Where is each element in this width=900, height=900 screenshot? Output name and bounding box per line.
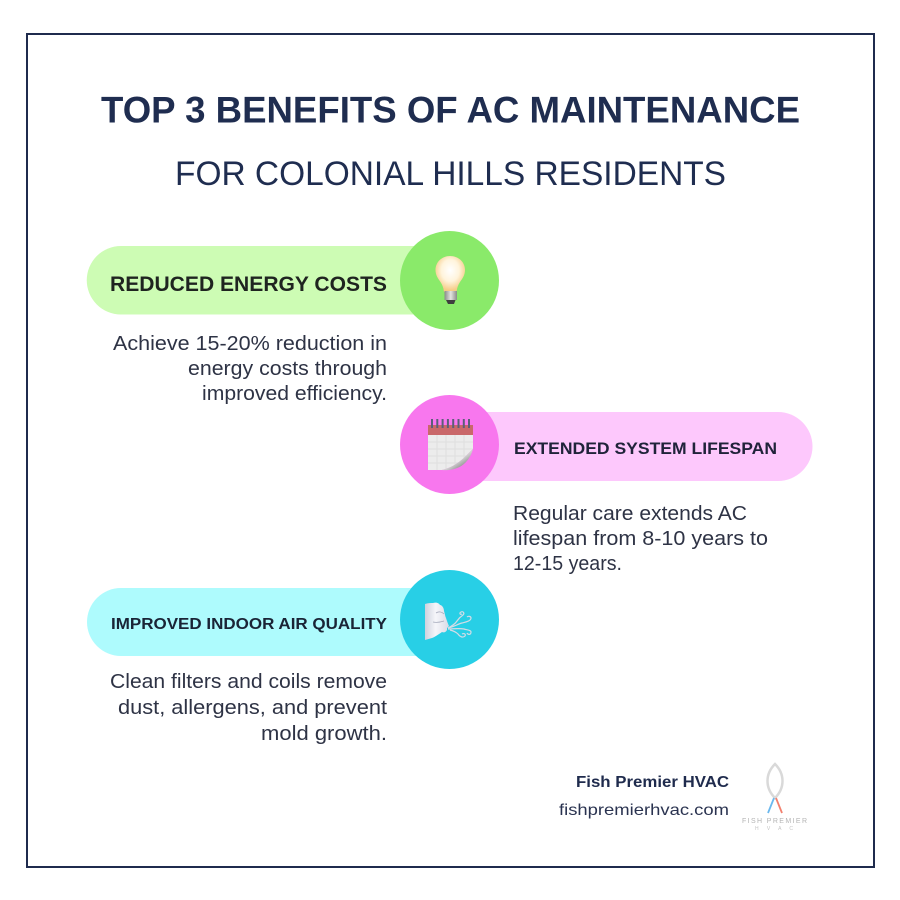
pill: reduced energy costs <box>87 246 450 314</box>
icon: Fish Premier HVAC logo: FISH PREMIER <box>742 818 807 825</box>
panel: extended system lifespan <box>400 395 813 575</box>
icon: calendar <box>428 419 473 470</box>
subtitle: FOR COLONIAL HILLS RESIDENTS <box>175 155 726 193</box>
circle: pink <box>400 395 499 494</box>
text: extended system lifespan description <box>513 503 768 575</box>
company name: Fish Premier HVAC <box>576 774 729 791</box>
website: fishpremierhvac.com <box>559 802 729 819</box>
text: improved indoor air quality description: dust, allergens, and prevent <box>118 697 387 719</box>
pill: improved indoor air quality <box>87 588 450 656</box>
text: improved indoor air quality description: Clean filters and coils remove <box>110 671 387 693</box>
text: reduced energy costs description: Achieve 15-20% reduction in <box>113 333 387 355</box>
panel: reduced energy costs <box>87 231 499 405</box>
icon: light bulb <box>436 256 465 304</box>
pill: extended system lifespan <box>450 412 813 481</box>
text: extended system lifespan description: 12-15 years. <box>513 553 622 575</box>
icon: face blowing air <box>425 603 471 640</box>
text: reduced energy costs description <box>113 333 387 405</box>
footer: company name and website <box>559 774 729 819</box>
text: improved indoor air quality description: mold growth. <box>261 723 387 745</box>
text: improved indoor air quality description <box>110 671 387 745</box>
circle: cyan <box>400 570 499 669</box>
heading: reduced energy costs: REDUCED ENERGY COSTS <box>110 273 387 296</box>
circle: green <box>400 231 499 330</box>
heading: extended system lifespan: EXTENDED SYSTEM LIFESPAN <box>514 439 777 458</box>
title: TOP 3 BENEFITS OF AC MAINTENANCE <box>101 90 800 130</box>
icon: Fish Premier HVAC logo <box>742 764 807 832</box>
text: reduced energy costs description: energy costs through <box>188 358 387 380</box>
heading: improved indoor air quality: IMPROVED INDOOR AIR QUALITY <box>111 616 387 633</box>
text: extended system lifespan description: Regular care extends AC <box>513 503 747 525</box>
text: extended system lifespan description: lifespan from 8-10 years to <box>513 528 768 550</box>
text: reduced energy costs description: improved efficiency. <box>202 383 387 405</box>
icon: Fish Premier HVAC logo: H V A C <box>755 826 793 832</box>
panel: improved indoor air quality <box>87 570 499 745</box>
